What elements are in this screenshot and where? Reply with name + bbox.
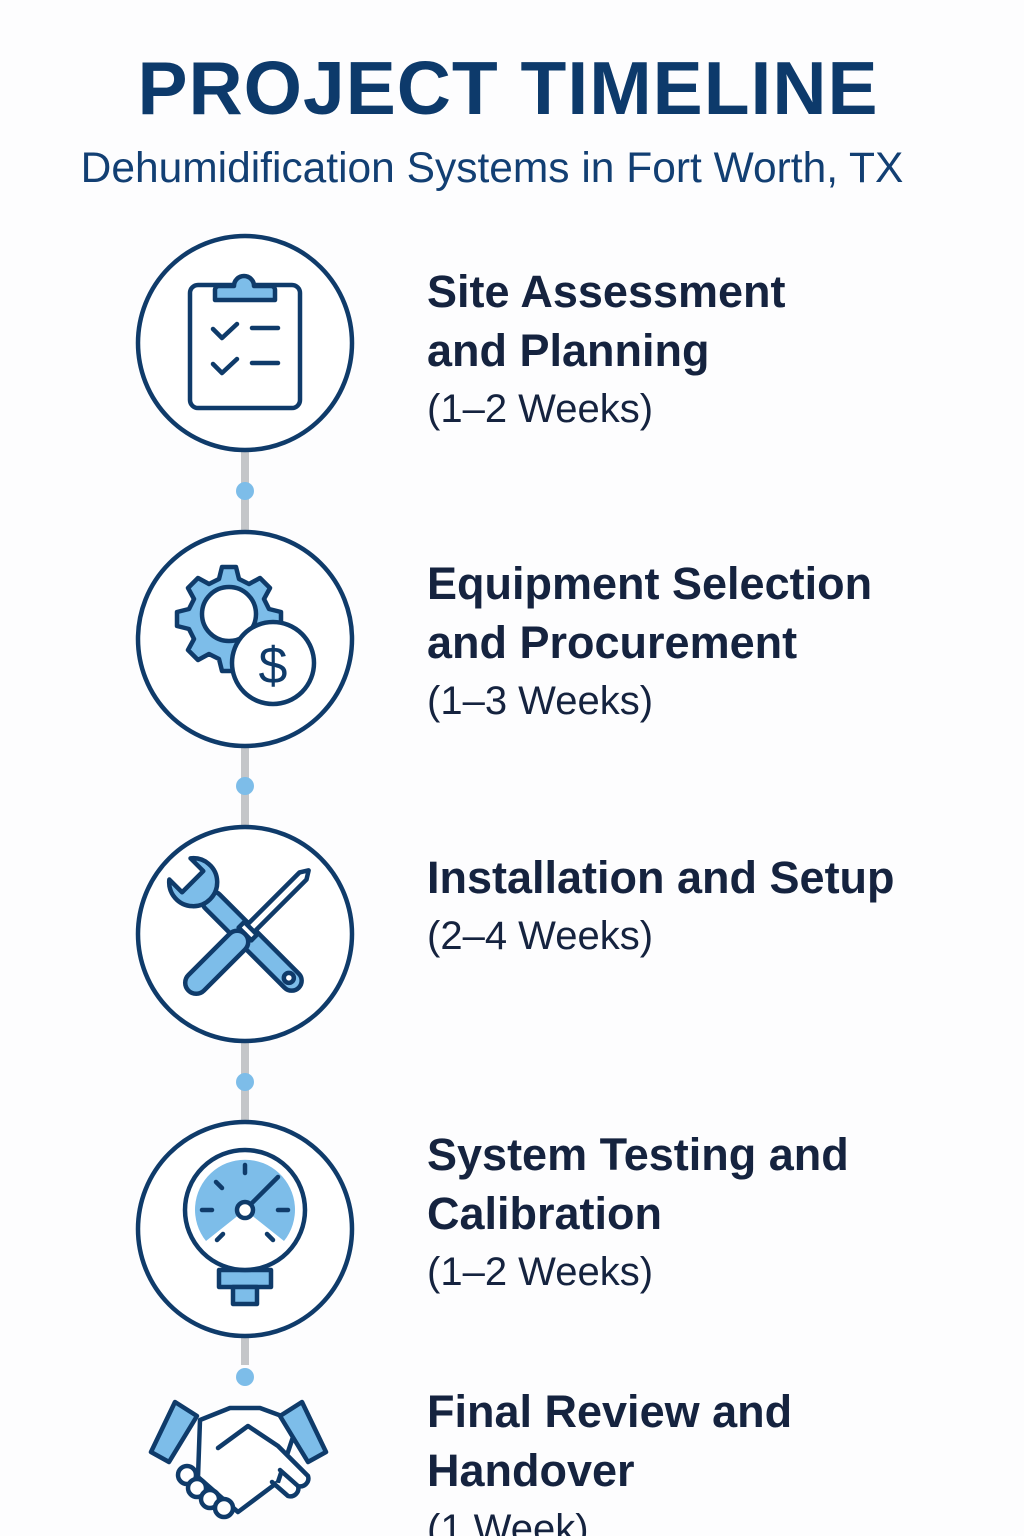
step 5 text: Handover	[427, 1445, 635, 1496]
step 3 text: Installation and Setup	[427, 852, 895, 903]
icon: handshake	[151, 1402, 326, 1517]
step 3 text	[427, 852, 895, 958]
step 3 text: (2–4 Weeks)	[427, 914, 653, 958]
subtitle: Dehumidification Systems in Fort Worth, TX	[81, 145, 903, 192]
step 4 text: System Testing and	[427, 1129, 849, 1180]
step 1 text: Site Assessment	[427, 266, 786, 317]
icon: gear and dollar	[138, 532, 352, 746]
step 1 text: and Planning	[427, 325, 710, 376]
step 4 text: (1–2 Weeks)	[427, 1250, 653, 1294]
icon: gear and dollar: $	[259, 637, 288, 695]
step 1 text: (1–2 Weeks)	[427, 387, 653, 431]
step 5 text: Final Review and	[427, 1386, 792, 1437]
title: PROJECT TIMELINE	[137, 46, 879, 130]
icon: gauge	[138, 1122, 352, 1336]
step 5 text	[427, 1386, 792, 1536]
step 2 text: Equipment Selection	[427, 558, 872, 609]
step 1 text	[427, 266, 786, 431]
step 2 text	[427, 558, 872, 723]
step 4 text	[427, 1129, 849, 1294]
icon: clipboard	[138, 236, 352, 450]
step 2 text: (1–3 Weeks)	[427, 679, 653, 723]
icon: wrench and screwdriver	[138, 827, 352, 1041]
step 2 text: and Procurement	[427, 617, 797, 668]
step 4 text: Calibration	[427, 1188, 662, 1239]
